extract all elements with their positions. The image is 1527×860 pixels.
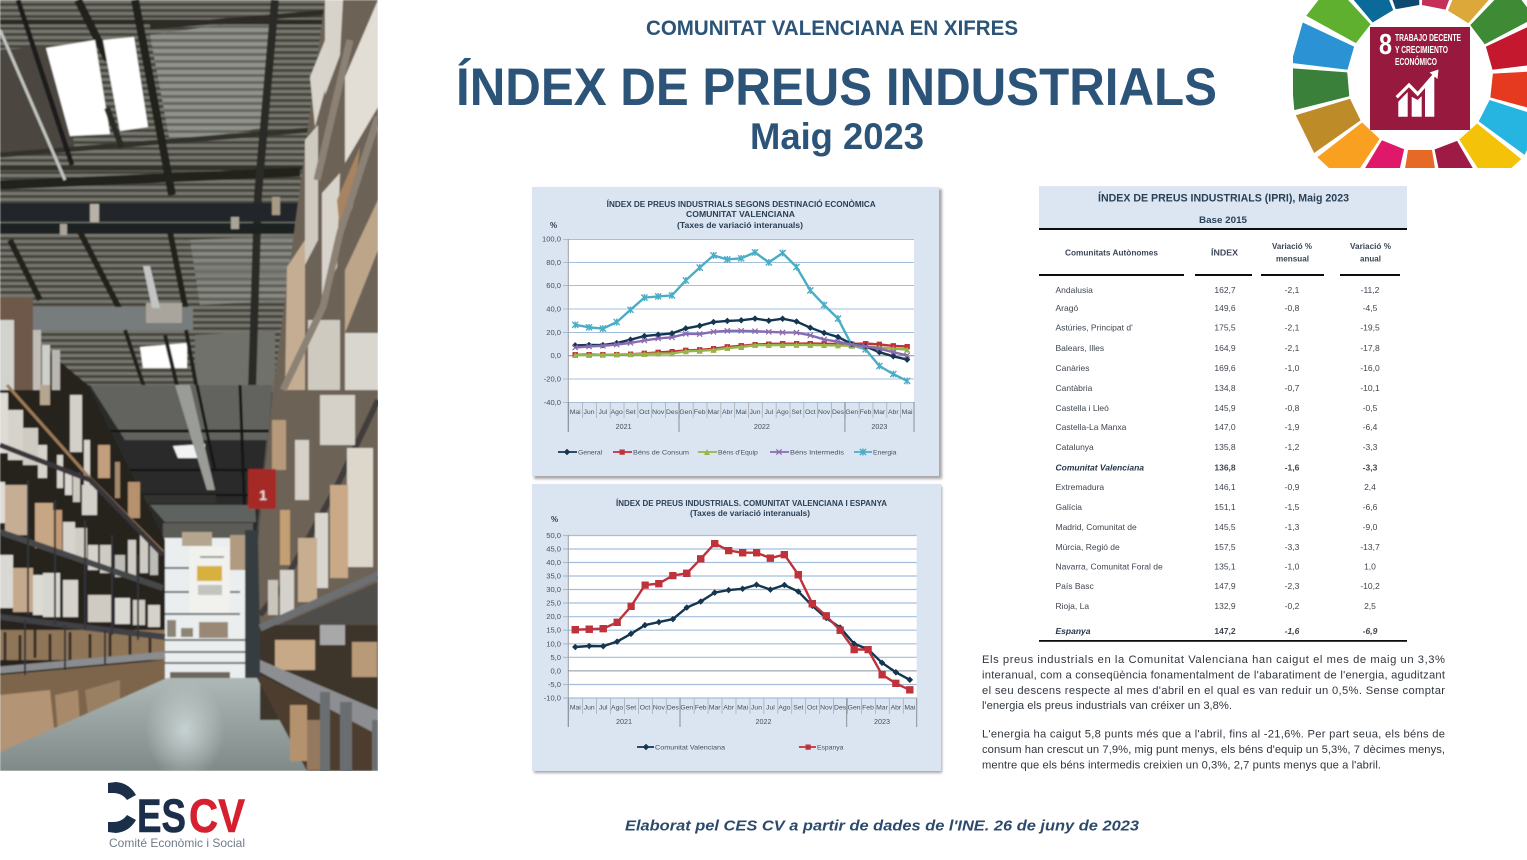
plot area bbox=[568, 239, 914, 402]
row: Comunitat Valenciana: Comunitat Valenciana bbox=[1056, 462, 1144, 472]
chart title: (Taxes de variació interanuals) bbox=[690, 509, 810, 518]
row: Galícia: -6,6 bbox=[1363, 502, 1378, 512]
month labels: Feb bbox=[695, 704, 707, 712]
year labels: 2022 bbox=[754, 422, 770, 431]
y axis labels: -10,0 bbox=[544, 694, 561, 702]
row: Comunitat Valenciana: -3,3 bbox=[1363, 462, 1378, 472]
y axis labels: 25,0 bbox=[546, 599, 561, 608]
series: Energia bbox=[575, 252, 907, 381]
legend bbox=[558, 449, 897, 456]
month labels: Oct bbox=[807, 704, 818, 712]
month labels: Oct bbox=[805, 409, 816, 416]
row: Aragó bbox=[1056, 303, 1378, 313]
row: Cantàbria: -0,7 bbox=[1285, 383, 1300, 393]
month labels: Nov bbox=[653, 704, 666, 712]
row: Madrid: Madrid, Comunitat de bbox=[1056, 522, 1137, 532]
text block: commentary paragraph 1 bbox=[982, 654, 1446, 712]
row: Cantàbria: 134,8 bbox=[1214, 383, 1236, 393]
kicker heading: COMUNITAT VALENCIANA EN XIFRES bbox=[646, 17, 1018, 40]
text block: commentary paragraph 1: el seu descens respecte al mes d'abril en el qual es van reduir un 0,5%. Sense comptar bbox=[982, 685, 1445, 697]
row: País Basc: País Basc bbox=[1056, 581, 1095, 591]
row: País Basc: 147,9 bbox=[1214, 581, 1236, 591]
chart title: ÍNDEX DE PREUS INDUSTRIALS SEGONS DESTINACIÓ ECONÒMICA bbox=[607, 200, 876, 209]
y axis labels: 40,0 bbox=[546, 304, 561, 314]
month labels: Mai bbox=[736, 409, 747, 416]
row: Canàries: -1,0 bbox=[1285, 363, 1300, 373]
y axis labels: -20,0 bbox=[544, 374, 561, 384]
month labels: Abr bbox=[891, 704, 902, 712]
right racks bbox=[258, 0, 378, 633]
month labels: Mai bbox=[737, 704, 749, 712]
row: Catalunya: -1,2 bbox=[1285, 442, 1300, 452]
month labels: Feb bbox=[862, 704, 874, 712]
text block: commentary paragraph 2: mentre que els béns intermedis creixien un 0,3%, 2,7 punts menys que a l'abril. bbox=[982, 760, 1381, 772]
SDG wheel bbox=[1293, 0, 1527, 168]
row: Astúries: 175,5 bbox=[1214, 322, 1236, 332]
month labels: Mar bbox=[709, 704, 721, 712]
photo: warehouse aisle bbox=[0, 0, 378, 780]
row: Castella-La Manxa bbox=[1056, 422, 1378, 432]
month labels: Des bbox=[834, 704, 847, 712]
column headers: Variació % bbox=[1350, 242, 1391, 251]
row: Madrid: -9,0 bbox=[1363, 522, 1378, 532]
row: Catalunya: 135,8 bbox=[1214, 442, 1236, 452]
row: Castella-La Manxa: 147,0 bbox=[1214, 422, 1236, 432]
row: Balears bbox=[1056, 343, 1380, 353]
chart title: ÍNDEX DE PREUS INDUSTRIALS. COMUNITAT VALENCIANA I ESPANYA bbox=[616, 499, 887, 508]
month labels: Set bbox=[791, 409, 802, 416]
row: Canàries: 169,6 bbox=[1214, 363, 1236, 373]
row: Catalunya: Catalunya bbox=[1056, 442, 1094, 452]
month labels: Feb bbox=[860, 409, 872, 416]
series: Béns de Consum bbox=[575, 344, 907, 355]
row: Múrcia bbox=[1056, 542, 1380, 552]
row: Navarra: 1,0 bbox=[1364, 562, 1376, 572]
row: Astúries: -2,1 bbox=[1285, 322, 1300, 332]
month labels bbox=[570, 704, 916, 712]
row: Múrcia: 157,5 bbox=[1214, 542, 1236, 552]
month labels: Nov bbox=[652, 409, 665, 416]
column headers: ÍNDEX bbox=[1211, 248, 1239, 258]
row: Aragó: -0,8 bbox=[1285, 303, 1300, 313]
month labels: Oct bbox=[640, 704, 650, 712]
legend: Béns Intermedis bbox=[790, 449, 845, 456]
logo: CES CV: ES bbox=[137, 789, 186, 842]
month labels: Set bbox=[626, 704, 636, 712]
row: Rioja bbox=[1056, 601, 1376, 611]
text block: commentary paragraph 2: consum han crescut un 7,9%, mig punt menys, els béns d'equip un 5,3%, 7 dècimes menys, bbox=[982, 744, 1445, 756]
y axis labels: 20,0 bbox=[546, 612, 561, 621]
column headers: mensual bbox=[1276, 254, 1309, 264]
y axis labels: 15,0 bbox=[546, 626, 561, 635]
footer source note: Elaborat pel CES CV a partir de dades de l'INE. 26 de juny de 2023 bbox=[625, 818, 1140, 834]
row: Astúries: Astúries, Principat d' bbox=[1056, 322, 1133, 332]
row: Navarra: -1,0 bbox=[1285, 562, 1300, 572]
row: Castella-La Manxa: -1,9 bbox=[1285, 422, 1300, 432]
row: Galícia bbox=[1056, 502, 1378, 512]
row: Extremadura: 146,1 bbox=[1214, 482, 1236, 492]
series: Comunitat Valenciana bbox=[575, 585, 910, 680]
year labels bbox=[616, 422, 887, 431]
month labels: Abr bbox=[723, 704, 735, 712]
row: Rioja: -0,2 bbox=[1285, 601, 1300, 611]
month labels: Des bbox=[666, 409, 679, 416]
month labels: Abr bbox=[722, 409, 733, 416]
y axis labels: 100,0 bbox=[542, 234, 561, 244]
month labels: Jun bbox=[584, 704, 595, 712]
legend: Béns de Consum bbox=[633, 449, 689, 456]
row: Extremadura: Extremadura bbox=[1056, 482, 1104, 492]
series: General bbox=[575, 319, 907, 360]
text block: commentary paragraph 1: Els preus industrials en la Comunitat Valenciana han caigut el mes de maig un 3,3% bbox=[982, 654, 1445, 666]
series: Béns Intermedis bbox=[575, 331, 907, 355]
chart title bbox=[550, 200, 876, 230]
y axis labels: 50,0 bbox=[546, 531, 561, 540]
row: Galícia: 151,1 bbox=[1214, 502, 1236, 512]
month labels: Set bbox=[625, 409, 636, 416]
row: Catalunya bbox=[1056, 442, 1378, 452]
row: Andalusia bbox=[1056, 285, 1380, 295]
row: Galícia: -1,5 bbox=[1285, 502, 1300, 512]
month labels: Jun bbox=[750, 409, 761, 416]
row: Rioja: 2,5 bbox=[1364, 601, 1376, 611]
back wall bbox=[163, 538, 245, 680]
logo: CES CV bbox=[108, 782, 246, 850]
chart title: COMUNITAT VALENCIANA bbox=[686, 210, 795, 219]
row: Madrid: -1,3 bbox=[1285, 522, 1300, 532]
y axis labels: 80,0 bbox=[546, 258, 561, 267]
month labels: Gen bbox=[845, 409, 858, 416]
logo: CES CV: CV bbox=[189, 789, 246, 842]
row: Andalusia: -11,2 bbox=[1361, 285, 1380, 295]
series: Espanya bbox=[575, 544, 910, 690]
y axis labels: 35,0 bbox=[546, 572, 561, 580]
y axis labels: 20,0 bbox=[546, 328, 561, 337]
legend: General bbox=[578, 449, 603, 456]
row: Balears: 164,9 bbox=[1214, 343, 1236, 353]
text block: commentary paragraph 2 bbox=[982, 728, 1445, 772]
left racks bbox=[0, 318, 165, 680]
month labels: Nov bbox=[818, 409, 831, 416]
row: Balears: -2,1 bbox=[1285, 343, 1300, 353]
row: Canàries bbox=[1056, 363, 1380, 373]
row: Espanya: Espanya bbox=[1056, 626, 1091, 636]
month labels: Ago bbox=[777, 409, 789, 416]
row: Balears: -17,8 bbox=[1360, 343, 1380, 353]
legend: Béns d'Equip bbox=[718, 449, 758, 456]
y axis labels: -5,0 bbox=[548, 680, 561, 689]
month labels: Set bbox=[793, 704, 804, 712]
month labels: Ago bbox=[611, 409, 623, 416]
row: Espanya bbox=[1056, 626, 1378, 636]
row: Canàries: Canàries bbox=[1056, 363, 1090, 373]
row: Astúries bbox=[1056, 322, 1380, 332]
year labels: 2021 bbox=[616, 717, 632, 726]
y axis labels: -40,0 bbox=[544, 398, 561, 407]
year labels: 2023 bbox=[874, 717, 890, 726]
chart title: % bbox=[550, 221, 557, 230]
row: Astúries: -19,5 bbox=[1360, 322, 1380, 332]
row: Andalusia: -2,1 bbox=[1285, 285, 1300, 295]
legend bbox=[637, 744, 844, 751]
row: Rioja: Rioja, La bbox=[1056, 601, 1089, 611]
row: País Basc bbox=[1056, 581, 1380, 591]
row: País Basc: -2,3 bbox=[1285, 581, 1300, 591]
row: Espanya: -6,9 bbox=[1363, 626, 1378, 636]
row: Comunitat Valenciana bbox=[1056, 462, 1378, 472]
table header band: ÍNDEX DE PREUS INDUSTRIALS (IPRI), Maig 2023 bbox=[1098, 192, 1349, 204]
y axis labels: 45,0 bbox=[546, 544, 561, 554]
month labels: Jun bbox=[584, 409, 595, 416]
column headers: anual bbox=[1360, 254, 1381, 264]
row: Navarra: 135,1 bbox=[1214, 562, 1236, 572]
row: Espanya: -1,6 bbox=[1285, 626, 1300, 636]
column headers bbox=[1065, 242, 1391, 264]
panel: chart Comunitat Valenciana vs Espanya bbox=[532, 484, 942, 773]
month labels: Ago bbox=[778, 704, 791, 712]
row: Aragó: 149,6 bbox=[1214, 303, 1236, 313]
skylight bbox=[46, 37, 148, 148]
y axis labels: 30,0 bbox=[546, 585, 561, 594]
year labels: 2021 bbox=[616, 422, 632, 431]
row: Andalusia: 162,7 bbox=[1214, 285, 1236, 295]
month labels: Des bbox=[667, 704, 680, 712]
year labels: 2022 bbox=[756, 717, 772, 726]
y axis labels: 0,0 bbox=[550, 351, 561, 360]
title: ÍNDEX DE PREUS INDUSTRIALS bbox=[456, 57, 1217, 117]
row: Extremadura bbox=[1056, 482, 1376, 492]
month labels: Mar bbox=[876, 704, 889, 712]
table header band: Base 2015 bbox=[1199, 215, 1247, 225]
row: Navarra: Navarra, Comunitat Foral de bbox=[1056, 562, 1163, 572]
column headers: Comunitats Autònomes bbox=[1065, 248, 1159, 258]
SDG 8 badge: 8 bbox=[1379, 29, 1392, 61]
y axis labels: 40,0 bbox=[546, 558, 561, 567]
y axis labels bbox=[544, 531, 561, 702]
y axis labels: 5,0 bbox=[550, 653, 561, 662]
row: Catalunya: -3,3 bbox=[1363, 442, 1378, 452]
row: Espanya: 147,2 bbox=[1214, 626, 1236, 636]
SDG 8 badge bbox=[1370, 27, 1470, 130]
month labels: Gen bbox=[679, 409, 692, 416]
month labels: Jul bbox=[766, 704, 775, 712]
row: Navarra bbox=[1056, 562, 1376, 572]
month labels: Feb bbox=[694, 409, 706, 416]
row: Castella i Lleó: -0,5 bbox=[1363, 403, 1378, 413]
month labels: Mar bbox=[874, 409, 886, 416]
text block: commentary paragraph 1: interanual, com a conseqüència fonamentalment de l'abaratiment de l'energia, aguditzant bbox=[982, 670, 1446, 682]
month labels: Nov bbox=[820, 704, 833, 712]
month labels: Jul bbox=[599, 704, 608, 712]
month labels bbox=[570, 409, 913, 416]
SDG 8 badge: Y CRECIMIENTO bbox=[1395, 44, 1448, 56]
month labels: Des bbox=[832, 409, 845, 416]
row: Andalusia: Andalusia bbox=[1056, 285, 1093, 295]
row: Madrid: 145,5 bbox=[1214, 522, 1236, 532]
month labels: Gen bbox=[848, 704, 861, 712]
deep ceiling bbox=[88, 385, 272, 540]
row: Cantàbria bbox=[1056, 383, 1380, 393]
chart title: % bbox=[551, 515, 558, 524]
series: Béns d'Equip bbox=[575, 345, 907, 355]
legend: Comunitat Valenciana bbox=[655, 744, 725, 751]
SDG 8 badge: ECONÓMICO bbox=[1395, 55, 1437, 68]
column headers: Variació % bbox=[1272, 242, 1312, 251]
floor bbox=[0, 678, 307, 771]
poster bbox=[188, 555, 231, 596]
row: Comunitat Valenciana: 136,8 bbox=[1214, 462, 1236, 472]
row: Extremadura: -0,9 bbox=[1285, 482, 1300, 492]
hanging aisle sign bbox=[248, 469, 276, 509]
table header band bbox=[1039, 186, 1407, 228]
month labels: Jul bbox=[599, 409, 608, 416]
table: IPRI by autonomous community bbox=[1039, 186, 1407, 642]
icon: growth bars and arrow bbox=[1397, 70, 1438, 117]
row: Rioja: 132,9 bbox=[1214, 601, 1236, 611]
chart title bbox=[551, 499, 887, 524]
row: Múrcia: -3,3 bbox=[1285, 542, 1300, 552]
y axis labels: 10,0 bbox=[546, 639, 561, 648]
row: Múrcia: Múrcia, Regió de bbox=[1056, 542, 1120, 552]
text block: commentary paragraph 2: L'energia ha caigut 5,8 punts més que a l'abril, fins al -21,6%. Per part seua, els béns de bbox=[982, 728, 1445, 740]
chart title: (Taxes de variació interanuals) bbox=[677, 221, 803, 230]
row: Galícia: Galícia bbox=[1056, 502, 1082, 512]
row: Aragó: Aragó bbox=[1056, 303, 1078, 313]
month labels: Gen bbox=[680, 704, 693, 712]
row: Balears: Balears, Illes bbox=[1056, 343, 1104, 353]
month labels: Oct bbox=[639, 409, 650, 416]
text block: commentary paragraph 1: l'energia els preus industrials van créixer un 3,8%. bbox=[982, 700, 1232, 712]
row: Castella i Lleó: -0,8 bbox=[1285, 403, 1300, 413]
y axis labels: 0,0 bbox=[550, 666, 561, 675]
row: Múrcia: -13,7 bbox=[1360, 542, 1380, 552]
row: Castella i Lleó: Castella i Lleó bbox=[1056, 403, 1109, 413]
month labels: Jun bbox=[751, 704, 762, 712]
y axis labels: 60,0 bbox=[546, 281, 561, 290]
row: Cantàbria: -10,1 bbox=[1360, 383, 1380, 393]
month labels: Mai bbox=[570, 409, 581, 416]
row: Castella-La Manxa: Castella-La Manxa bbox=[1056, 422, 1127, 432]
plot area bbox=[568, 535, 917, 698]
month labels: Jul bbox=[764, 409, 774, 416]
logo: CES CV: Comité Econòmic i Social bbox=[109, 836, 245, 850]
row: Canàries: -16,0 bbox=[1360, 363, 1380, 373]
legend: Espanya bbox=[817, 744, 844, 751]
year labels: 2023 bbox=[871, 422, 887, 431]
row: País Basc: -10,2 bbox=[1360, 581, 1380, 591]
hanging aisle sign: 1 bbox=[259, 487, 267, 503]
month labels: Abr bbox=[888, 409, 899, 416]
y axis labels bbox=[542, 234, 561, 407]
row: Extremadura: 2,4 bbox=[1364, 482, 1376, 492]
row: Comunitat Valenciana: -1,6 bbox=[1285, 462, 1300, 472]
subtitle date: Maig 2023 bbox=[750, 116, 924, 157]
legend: Energia bbox=[873, 449, 897, 456]
SDG 8 badge: TRABAJO DECENTE bbox=[1395, 32, 1461, 44]
panel: chart by economic destination bbox=[532, 187, 942, 479]
month labels: Mai bbox=[902, 409, 913, 416]
row: Cantàbria: Cantàbria bbox=[1056, 383, 1093, 393]
month labels: Mai bbox=[904, 704, 916, 712]
row: Castella i Lleó bbox=[1056, 403, 1378, 413]
month labels: Mai bbox=[570, 704, 581, 712]
month labels: Mar bbox=[708, 409, 720, 416]
row: Castella i Lleó: 145,9 bbox=[1214, 403, 1236, 413]
row: Aragó: -4,5 bbox=[1363, 303, 1378, 313]
row: Madrid bbox=[1056, 522, 1378, 532]
month labels: Ago bbox=[611, 704, 623, 712]
year labels bbox=[616, 717, 890, 726]
row: Castella-La Manxa: -6,4 bbox=[1363, 422, 1378, 432]
